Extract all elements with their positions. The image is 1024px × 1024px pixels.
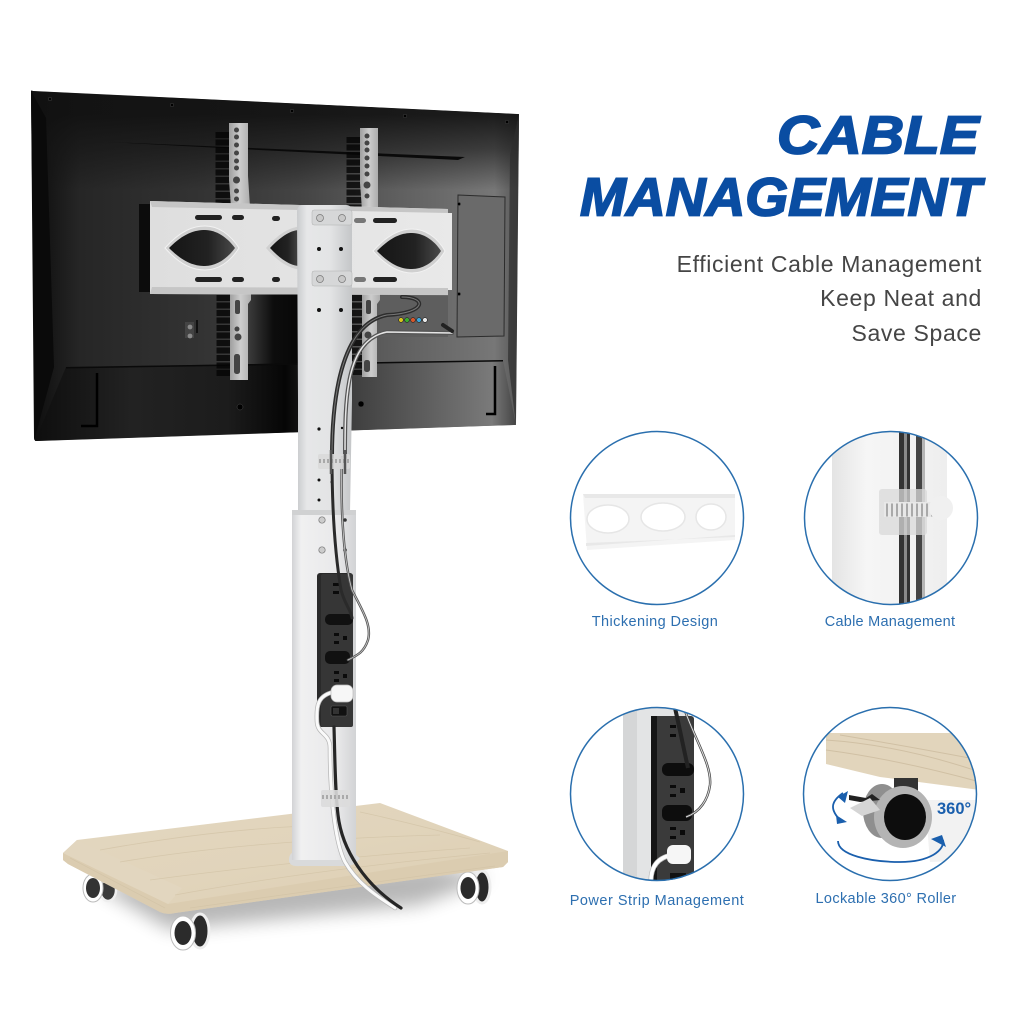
label: lockable roller: Lockable 360° Roller: [816, 891, 956, 907]
caster: front: [170, 914, 209, 950]
bracket back shadows: [146, 132, 355, 377]
subtitle text: Save Space: [851, 320, 982, 346]
white power cord: [317, 692, 395, 908]
TV edge screws: [48, 97, 509, 410]
white plug: [331, 685, 353, 702]
plugs: [325, 614, 353, 625]
switch: [331, 706, 347, 716]
title: MANAGEMENT: [580, 168, 985, 228]
label: 360 degrees: 360°: [937, 800, 971, 818]
TV lower corner marks: [81, 366, 495, 426]
circle: lockable roller: [803, 707, 985, 881]
subtitle text: Efficient Cable Management: [677, 251, 982, 277]
black power cord: [334, 727, 401, 908]
cable clip: lower: [321, 790, 350, 807]
AV cables: [332, 297, 452, 457]
cable clip: upper: [318, 450, 350, 474]
title: CABLE: [777, 106, 981, 166]
subtitle text: Keep Neat and: [820, 285, 982, 311]
upper pole: [297, 205, 352, 512]
circle: power strip management: [570, 700, 744, 890]
lower pole: [292, 510, 356, 860]
circle: thickening design: [570, 431, 744, 605]
mounting rail: lower left: [230, 293, 251, 380]
lower cables: [332, 457, 369, 660]
label: cable management: Cable Management: [825, 614, 955, 630]
circle: cable management: [804, 425, 978, 615]
mounting rail: upper right: [360, 128, 378, 210]
TV inner compartment: [457, 195, 505, 337]
AV ports: [399, 318, 427, 322]
title: [580, 106, 985, 228]
pole plate lower: [312, 271, 352, 286]
outlets: [333, 583, 347, 682]
caster: back left: [83, 874, 116, 902]
mounting rail: upper left: [229, 123, 250, 207]
TV logo mark: [185, 320, 198, 338]
subtitle text: [677, 251, 982, 346]
mounting rail: lower right: [362, 293, 380, 377]
power strip: [317, 573, 353, 727]
floor shadow: [95, 865, 490, 930]
pole plate upper: [312, 210, 352, 225]
label: power strip management: Power Strip Management: [570, 893, 744, 909]
label: thickening design: Thickening Design: [592, 614, 718, 630]
pole foot: [289, 852, 360, 866]
TV back panel: [31, 90, 519, 441]
base board: [63, 803, 508, 914]
mounting plate: [150, 201, 452, 295]
caster: right: [457, 871, 490, 904]
plate holes: [165, 226, 239, 270]
